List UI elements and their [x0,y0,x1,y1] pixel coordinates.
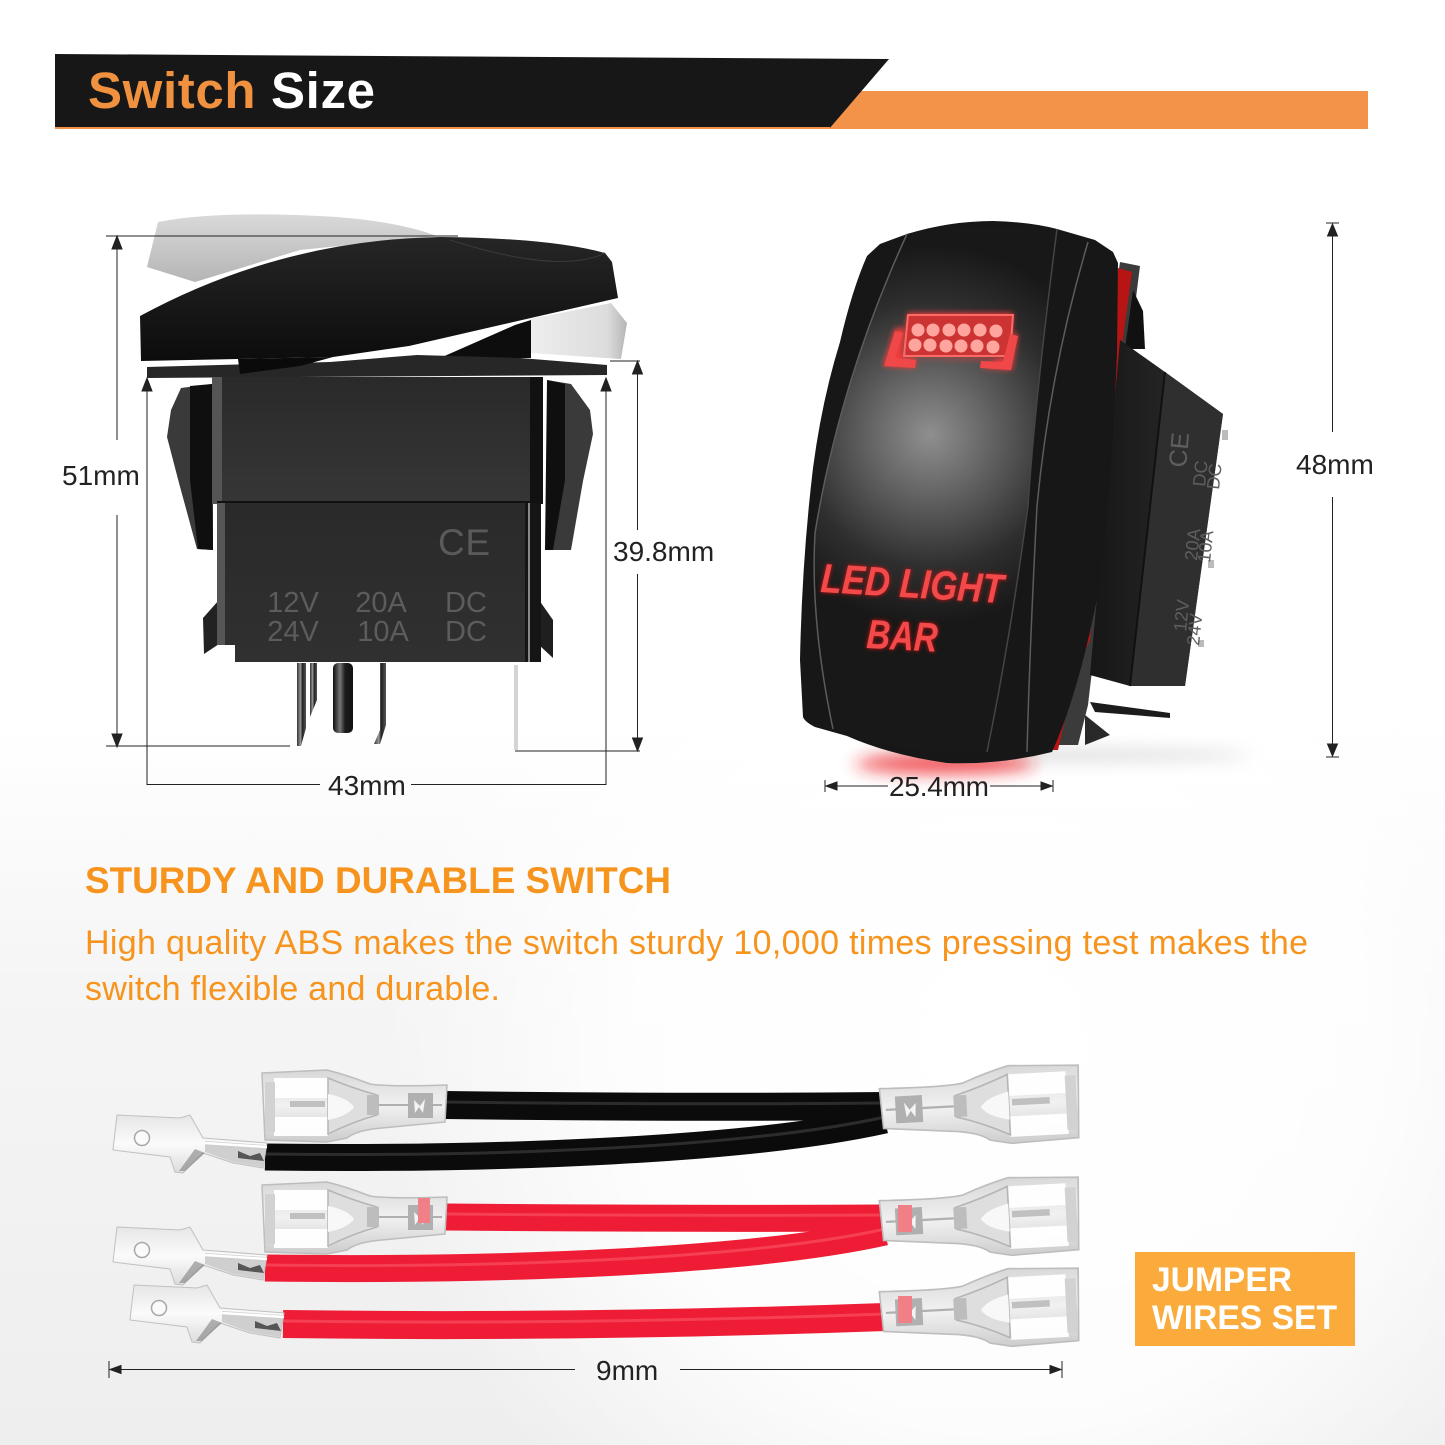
header banner [55,54,1368,129]
dimension: 48mm [1296,223,1374,757]
icon: LED light bar [883,313,1018,370]
feature heading: STURDY AND DURABLE SWITCH [85,860,671,901]
ratings text: DC [445,616,487,648]
ghost rocker down position [530,303,627,359]
callout: jumper wires set: JUMPER [1152,1261,1292,1299]
switch label: LED LIGHT BAR [819,555,1007,661]
rear housing markings: 10A [1194,529,1217,563]
dimension: 39.8mm [515,361,714,751]
red wire pair [265,1214,885,1269]
female terminals left [262,1070,447,1254]
rear housing markings: 12V [1170,598,1193,632]
right switch perspective view [800,221,1250,774]
switch label: LED LIGHT BAR: BAR [866,611,939,661]
rocker face [800,221,1118,763]
mounting clips [167,380,593,658]
male terminals [113,1115,284,1343]
panel edge lines [814,229,1088,752]
single red wire [283,1314,885,1325]
dimension: 25.4mm [825,771,1053,802]
dimension: 48mm: 48mm [1296,449,1374,480]
switch label: LED LIGHT BAR: LED LIGHT [819,555,1007,612]
rear housing markings: 24V [1183,612,1206,646]
dimension: 43mm [142,378,611,801]
title: Switch Size [88,62,375,119]
ratings text: 20A [355,587,407,619]
rear housing markings: 20A [1181,527,1204,561]
feature description: High quality ABS makes the switch sturdy 10,000 times pressing test makes the [85,924,1308,962]
body [212,377,543,662]
female terminals right [878,1062,1082,1353]
floor shadow and red glow [855,748,1250,774]
rocker [140,237,618,361]
face highlight panel [814,227,1057,752]
dimension: 43mm: 43mm [328,770,406,801]
black wire pair [265,1102,885,1158]
jumper wires illustration [113,1062,1082,1353]
flange [147,355,607,378]
ratings text [267,587,487,648]
rear housing markings [1164,431,1226,646]
dimension: 51mm [62,236,458,747]
left switch side view [140,214,627,750]
ratings text: 10A [357,616,409,648]
feature description: switch flexible and durable. [85,970,500,1008]
ratings text: 24V [267,616,319,648]
rear housing markings: CE [1164,431,1195,469]
rear housing markings: DC [1203,462,1226,490]
rear housing markings: DC [1189,459,1212,487]
pins [297,663,518,750]
ratings text: DC [445,587,487,619]
dimension: 51mm: 51mm [62,460,140,491]
ghost rocker up position [147,214,437,282]
dimension: 9mm: 9mm [596,1355,658,1386]
callout: jumper wires set [1135,1252,1355,1346]
pillar under rocker [440,320,531,358]
ce mark: CE [438,522,490,563]
rear housing [1040,262,1228,750]
dimension: 9mm [109,1355,1062,1386]
ratings text: 12V [267,587,319,619]
feature description [85,924,1308,1008]
callout: jumper wires set: WIRES SET [1152,1299,1337,1337]
dimension: 39.8mm: 39.8mm [613,536,714,567]
dimension: 25.4mm: 25.4mm [889,771,989,802]
